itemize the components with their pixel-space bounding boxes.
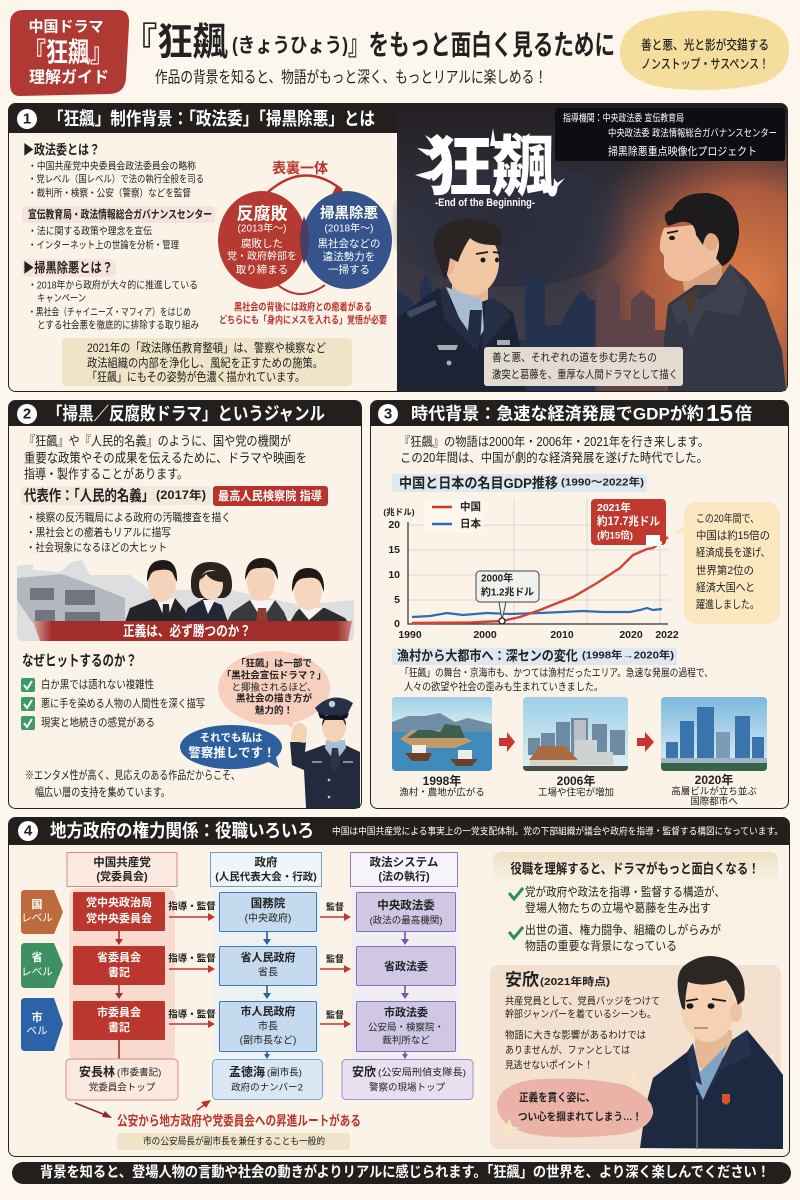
- legal boxes: 中央政法委: [377, 898, 435, 912]
- horizontal arrows: 指導・監督: [168, 900, 216, 912]
- main title: 』をもっと面白く見るために: [348, 30, 615, 60]
- panel 4 heading: 地方政府の権力関係：役職いろいろ: [50, 820, 314, 841]
- representative work: 最高人民検察院 指導: [218, 488, 322, 503]
- yellow callout: この20年間で、: [696, 511, 759, 525]
- intro text: [399, 434, 709, 465]
- government column background: [214, 888, 320, 1060]
- panel 4 heading: [9, 818, 789, 845]
- 2021 annotation: (約15倍): [597, 530, 633, 542]
- speech bubble: pink: 「狂飆」は一部で: [236, 658, 312, 670]
- header badge: 『狂飆』: [24, 37, 112, 68]
- box: why roles matter: 登場人物たちの立場や葛藤を生み出す: [525, 900, 711, 915]
- character boxes: 安欣: [352, 1064, 376, 1079]
- text: 掃黒除悪とは: キャンペーン: [37, 294, 86, 304]
- sponsor box: 指導機関：中央政法委 宣伝教育局: [563, 112, 684, 124]
- image: 2006 developing city: [523, 697, 628, 771]
- intro text: [24, 434, 307, 482]
- representative work: 代表作：「人民的名義」: [24, 486, 154, 504]
- text: 宣伝教育局: ・法に関する政策や理念を宣伝: [28, 224, 152, 238]
- image caption: 善と悪、それぞれの道を歩む男たちの: [492, 350, 657, 364]
- footer banner: [12, 1162, 791, 1184]
- panel 1 heading: 「狂飆」制作背景：「政法委」「掃黒除悪」とは: [48, 108, 375, 129]
- character boxes: (市委書記): [117, 1066, 161, 1078]
- character boxes: (副市長): [267, 1066, 302, 1078]
- panel 3 heading: 15: [706, 400, 733, 426]
- venn diagram: 黒社会の背後には政府との癒着がある: [234, 300, 372, 314]
- text: 政法委とは: ・党レベル（国レベル）で法の執行全般を司る: [28, 172, 204, 186]
- promotion route: 市の公安局長が副市長を兼任することも一般的: [143, 1136, 325, 1148]
- column headers: (法の執行): [378, 869, 430, 883]
- why it hits checklist: 白か黒では語れない複雑性: [41, 677, 154, 691]
- axis labels: (兆ドル): [383, 507, 415, 517]
- sponsor box: [555, 108, 785, 161]
- venn diagram: 掃黒除悪: [320, 205, 378, 222]
- character boxes: (公安局刑偵支隊長): [378, 1066, 466, 1078]
- intro text: この20年間は、中国が劇的な経済発展を遂げた時代でした。: [400, 450, 708, 465]
- axis labels: 5: [394, 594, 400, 606]
- horizontal arrows: 監督: [326, 1009, 344, 1020]
- panel 2 heading: 2: [23, 406, 31, 422]
- government boxes: 省人民政府: [240, 950, 296, 964]
- axis labels: 20: [388, 519, 400, 531]
- image: 1998 fishing village: [392, 697, 492, 771]
- text: 宣伝教育局: 宣伝教育局・政法情報総合ガバナンスセンター: [28, 207, 212, 221]
- description: 見逃せないポイント！: [505, 1058, 593, 1072]
- government boxes: 市人民政府: [240, 1004, 296, 1018]
- why it hits checklist: [21, 652, 205, 730]
- panel 2 heading: 「掃黒／反腐敗ドラマ」というジャンル: [47, 404, 325, 424]
- speech bubble: pink: 黒社会の描き方が: [236, 692, 312, 704]
- axis labels: 2022: [655, 629, 679, 641]
- axis labels: 15: [388, 544, 400, 556]
- 2000 annotation: 約1.2兆ドル: [481, 586, 534, 598]
- pink speech blob: つい心を掴まれてしまう…！: [518, 1110, 642, 1123]
- Shenzhen text: 「狂飆」の舞台・京海市も、かつては漁村だったエリア。急速な発展の過程で、: [400, 666, 713, 679]
- name: (2021年時点): [540, 975, 610, 988]
- level labels: 省: [32, 950, 42, 964]
- image: 2020 skyscrapers: [661, 697, 767, 771]
- box: why roles matter: [493, 852, 778, 960]
- police officer with raised fist: [290, 698, 360, 808]
- header badge: 中国ドラマ: [28, 18, 104, 36]
- Shenzhen heading: 漁村から大都市へ：深センの変化: [397, 648, 578, 664]
- Shenzhen text: [400, 666, 713, 693]
- venn diagram: (2013年～): [238, 222, 286, 234]
- column headers: (人民代表大会・行政): [215, 870, 317, 883]
- venn diagram: 違法勢力を: [323, 250, 375, 263]
- skyline: [397, 262, 665, 391]
- description: 共産党員として、党員バッジをつけて: [505, 994, 660, 1008]
- party boxes: 書記: [108, 965, 130, 979]
- legal boxes: (政法の最高機関): [370, 914, 442, 926]
- panel 1 heading: [9, 104, 397, 133]
- GDP line chart: [383, 498, 679, 641]
- description: [505, 994, 660, 1072]
- panel 2: genre: [8, 400, 362, 808]
- 2021 annotation: 約17.7兆ドル: [597, 514, 660, 528]
- yellow callout: 善と悪、光と影が交錯する: [641, 38, 769, 52]
- venn diagram: 反腐敗: [236, 204, 288, 224]
- panel 1 heading: 1: [23, 110, 31, 128]
- callout: 政法隊伍教育整頓: 2021年の「政法隊伍教育整頓」は、警察や検察など: [87, 340, 326, 355]
- bullet list: ・黒社会との癒着もリアルに描写: [26, 525, 171, 539]
- name: 安欣: [505, 970, 539, 990]
- speech bubble: pink: [218, 651, 330, 728]
- poster illustration: [385, 104, 787, 391]
- legal boxes: 市政法委: [384, 1005, 428, 1019]
- year labels: 国際都市へ: [690, 796, 738, 808]
- year labels: 2020年: [695, 772, 733, 787]
- speech bubble: pink: 魅力的！: [255, 704, 293, 716]
- footnote: 幅広い層の支持を集めています。: [35, 785, 170, 799]
- venn diagram: 党・政府幹部を: [227, 250, 297, 262]
- name: [505, 970, 610, 990]
- party boxes: 党中央政治局: [86, 895, 152, 909]
- bullet list: [26, 510, 231, 554]
- man in dark coat: [660, 193, 786, 391]
- text: 政法委とは: ▶政法委とは？: [23, 142, 100, 158]
- party boxes: 書記: [108, 1020, 130, 1034]
- drama illustration: [17, 558, 354, 641]
- text: 掃黒除悪とは: ・黒社会（チャイニーズ・マフィア）をはじめ: [28, 306, 191, 318]
- character boxes: [66, 1059, 473, 1100]
- government boxes: 省長: [258, 966, 278, 978]
- venn diagram: 黒社会などの: [318, 237, 380, 250]
- police officer: [397, 219, 525, 391]
- text: 掃黒除悪とは: とする社会悪を徹底的に排除する取り組み: [37, 318, 199, 332]
- chart heading: (1990～2022年): [561, 476, 644, 488]
- promotion route: 公安から地方政府や党委員会への昇進ルートがある: [117, 1112, 361, 1128]
- promotion route: [75, 1100, 361, 1150]
- 2021 annotation: [591, 499, 666, 546]
- panel 2 heading: [9, 401, 361, 426]
- why it hits checklist: 現実と地続きの感覚がある: [41, 715, 155, 729]
- horizontal arrows: 監督: [326, 901, 344, 912]
- legal boxes: [356, 892, 456, 1059]
- government boxes: 国務院: [251, 897, 286, 910]
- yellow callout: 経済大国へと: [696, 580, 755, 594]
- intro text: 『狂飆』の物語は2000年・2006年・2021年を行き来します。: [399, 434, 709, 449]
- text: 宣伝教育局: ・インターネット上の世論を分析・管理: [28, 238, 179, 252]
- panel 4 heading: 4: [24, 822, 33, 840]
- column headers: 政府: [254, 855, 278, 869]
- yellow callout: 中国は約15倍の: [696, 528, 770, 542]
- character boxes: 政府のナンバー2: [231, 1082, 303, 1094]
- chart heading: 中国と日本の名目GDP推移: [399, 475, 558, 491]
- axis labels: 10: [388, 569, 400, 581]
- level labels: 市: [32, 1010, 42, 1024]
- Shenzhen heading: (1998年→2020年): [582, 648, 674, 662]
- bullet list: ・社会現象になるほどの大ヒット: [26, 540, 167, 554]
- column headers: (党委員会): [96, 869, 148, 883]
- year labels: 1998年: [423, 773, 461, 788]
- box: why roles matter: 物語の重要な背景になっている: [525, 939, 677, 953]
- legend: [424, 500, 484, 532]
- panel 3 heading: 倍: [735, 404, 752, 424]
- government boxes: 市長: [258, 1020, 278, 1032]
- yellow callout: 世界第2位の: [696, 563, 754, 577]
- footnote: ※エンタメ性が高く、見応えのある作品だからこそ、: [25, 768, 240, 782]
- subtitle: 作品の背景を知ると、物語がもっと深く、もっとリアルに楽しめる！: [155, 68, 547, 86]
- text: 掃黒除悪とは: ・2018年から政府が大々的に推進している: [28, 278, 198, 292]
- legal boxes: 省政法委: [384, 959, 428, 973]
- why it hits checklist: 悪に手を染める人物の人間性を深く描写: [41, 696, 205, 710]
- box: An Xin profile: [490, 956, 783, 1149]
- column headers: 中国共産党: [93, 855, 151, 869]
- venn diagram: 一掃する: [328, 263, 370, 276]
- year labels: 工場や住宅が増加: [538, 786, 614, 798]
- party column background: [69, 888, 175, 1060]
- text: 政法委とは: [23, 142, 204, 200]
- description: ありませんが、ファンとしては: [505, 1044, 630, 1056]
- callout: 政法隊伍教育整頓: 政法組織の内部を浄化し、風紀を正すための施策。: [87, 356, 323, 370]
- axis labels: 0: [394, 618, 400, 630]
- intro text: 重要な政策やその成果を伝えるために、ドラマや映画を: [24, 450, 307, 466]
- year labels: 漁村・農地が広がる: [399, 786, 485, 798]
- main title: 『狂飆: [122, 22, 228, 64]
- sponsor box: 掃黒除悪重点映像化プロジェクト: [608, 144, 757, 158]
- Japan GDP line: [412, 608, 662, 617]
- speech bubble: blue: [180, 725, 282, 769]
- box: why roles matter: 役職を理解すると、ドラマがもっと面白くなる！: [510, 860, 760, 876]
- Shenzhen text: 人々の欲望や社会の歪みも生まれていきました。: [404, 680, 603, 693]
- why it hits checklist: なぜヒットするのか？: [22, 652, 137, 670]
- year labels: 高層ビルが立ち並ぶ: [671, 786, 757, 798]
- header badge: 理解ガイド: [29, 68, 109, 86]
- panel 3: era background: [370, 400, 788, 808]
- year labels: [399, 772, 757, 808]
- title logo: -End of the Beginning-: [435, 197, 535, 209]
- party boxes: 党中央委員会: [86, 911, 152, 925]
- axis labels: 2020: [619, 629, 643, 641]
- venn diagram: 腐敗した: [241, 237, 283, 250]
- speech bubble: blue: それでも私は: [200, 731, 263, 744]
- pink speech blob: [497, 1072, 653, 1139]
- intro text: 『狂飆』や『人民的名義』のように、国や党の機関が: [24, 434, 291, 448]
- pink speech blob: 正義を貫く姿に、: [519, 1090, 595, 1104]
- panel 4: power structure: [8, 818, 790, 1156]
- level labels: ベル: [26, 1025, 48, 1037]
- character boxes: 安長林: [79, 1064, 115, 1079]
- arrow: [637, 732, 654, 752]
- axis labels: 1990: [398, 629, 422, 641]
- footnote: [25, 768, 240, 799]
- level labels: レベル: [21, 912, 53, 924]
- government boxes: (副市長など): [240, 1034, 296, 1046]
- red banner: 正義は、必ず勝つのか？: [123, 623, 251, 639]
- year labels: 2006年: [557, 773, 595, 788]
- yellow callout: [620, 10, 789, 90]
- government boxes: [220, 892, 316, 1059]
- character boxes: 孟徳海: [229, 1064, 265, 1079]
- axis labels: 2010: [550, 629, 574, 641]
- venn diagram: どちらにも「身内にメスを入れる」覚悟が必要: [219, 314, 387, 326]
- venn diagram: 取り締まる: [236, 263, 288, 276]
- horizontal arrows: 監督: [326, 953, 344, 964]
- venn diagram: (2018年～): [325, 222, 373, 234]
- venn diagram: 表裏一体: [272, 160, 328, 176]
- legal boxes: 公安局・検察院・: [368, 1022, 444, 1034]
- 2021 annotation: 2021年: [597, 501, 631, 514]
- legal column background: [352, 888, 460, 1060]
- panel 1: production background: [8, 104, 788, 392]
- box: why roles matter: 党が政府や政法を指導・監督する構造が、: [525, 884, 725, 899]
- intro text: 指導・製作することがあります。: [24, 466, 188, 482]
- axis labels: [383, 507, 679, 641]
- yellow callout: [672, 502, 780, 624]
- description: 幹部ジャンパーを着ているシーンも。: [505, 1008, 656, 1020]
- 2000 annotation: 2000年: [481, 572, 513, 584]
- yellow callout: 経済成長を遂げ、: [696, 546, 770, 559]
- text: 宣伝教育局: [22, 206, 215, 252]
- horizontal arrows: 指導・監督: [168, 952, 216, 964]
- red banner: [33, 621, 352, 641]
- header badge: [10, 10, 129, 96]
- panel 3 heading: 時代背景：急速な経済発展でGDPが約: [411, 404, 704, 424]
- speech bubble: pink: 「黒社会宣伝ドラマ？」: [222, 670, 326, 682]
- horizontal arrows: [168, 900, 351, 1028]
- 2000 annotation: [476, 571, 539, 624]
- column headers: [67, 852, 458, 886]
- image caption: 激突と葛藤を、重厚な人間ドラマとして描く: [492, 367, 678, 381]
- China GDP line: [412, 537, 668, 623]
- horizontal arrows: 指導・監督: [168, 1008, 216, 1020]
- bullet list: ・検察の反汚職局による政府の汚職捜査を描く: [26, 510, 231, 524]
- callout: 政法隊伍教育整頓: 「狂飆」にもその姿勢が色濃く描かれています。: [87, 369, 305, 384]
- Shenzhen heading: [392, 648, 677, 665]
- callout: 政法隊伍教育整頓: [62, 338, 352, 386]
- axis labels: 2000: [473, 629, 497, 641]
- description: 物語に大きな影響があるわけでは: [505, 1028, 646, 1042]
- venn diagram: [218, 160, 392, 326]
- box: why roles matter: 出世の道、権力闘争、組織のしがらみが: [525, 922, 721, 937]
- legal boxes: 裁判所など: [382, 1034, 430, 1046]
- level labels: レベル: [21, 966, 53, 978]
- chart heading: [392, 474, 647, 492]
- speech bubble: pink: と揶揄されるほど、: [231, 682, 317, 694]
- yellow callout: 躍進しました。: [696, 598, 759, 611]
- representative work: (2017年): [156, 488, 206, 502]
- text: 政法委とは: ・中国共産党中央委員会政法委員会の略称: [28, 160, 196, 172]
- party boxes: 省委員会: [97, 950, 141, 964]
- image caption: [484, 347, 683, 386]
- character boxes: 警察の現場トップ: [369, 1082, 445, 1094]
- panel 3 heading: 3: [384, 406, 392, 422]
- representative work: [21, 486, 328, 506]
- text: 政法委とは: ・裁判所・検察・公安（警察）などを監督: [28, 186, 191, 200]
- speech bubble: blue: 警察推しです！: [188, 745, 276, 760]
- text: 掃黒除悪とは: [22, 259, 199, 332]
- text: 掃黒除悪とは: ▶掃黒除悪とは？: [23, 260, 113, 276]
- legend: 中国: [460, 500, 481, 513]
- panel 3 heading: [371, 400, 788, 426]
- character boxes: 党委員会トップ: [89, 1082, 156, 1094]
- four characters: [125, 558, 348, 622]
- main title: (きょうひょう): [232, 34, 348, 57]
- column headers: 政法システム: [370, 855, 438, 869]
- party boxes: 市委員会: [97, 1005, 141, 1019]
- arrow: [499, 732, 515, 752]
- government boxes: (中央政府): [245, 912, 291, 924]
- legend: 日本: [460, 517, 481, 530]
- level labels: 国: [32, 898, 42, 911]
- main title: [122, 22, 615, 64]
- party boxes: [73, 892, 165, 1060]
- level labels: [21, 890, 63, 1051]
- title logo: 狂飆: [426, 114, 558, 210]
- character portrait: [640, 956, 783, 1149]
